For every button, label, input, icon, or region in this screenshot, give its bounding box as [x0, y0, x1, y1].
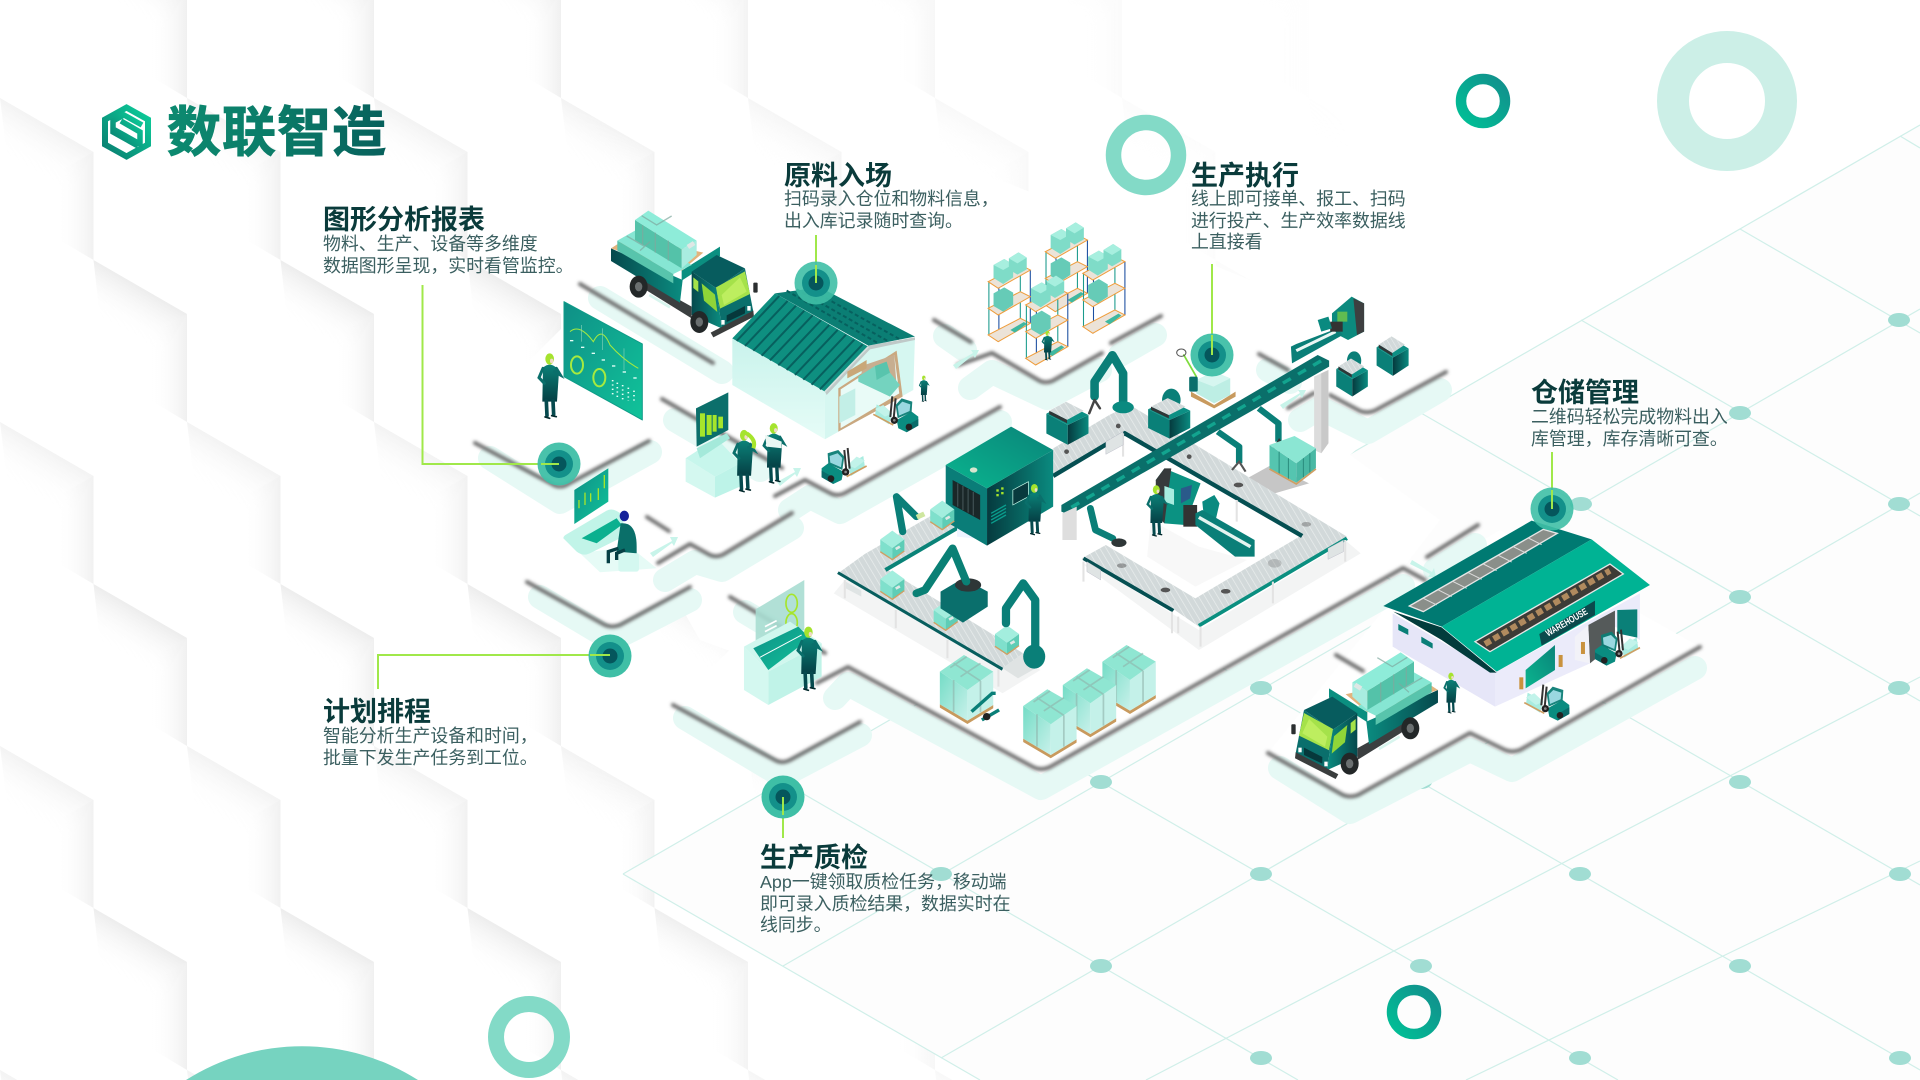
text: warehouse management: 库管理，库存清晰可查。 — [1531, 429, 1728, 449]
leader lines — [378, 235, 1552, 838]
text: warehouse management — [1531, 378, 1728, 449]
text: raw material — [784, 161, 999, 231]
warehouse: finished goods — [1383, 521, 1650, 707]
logo icon — [105, 108, 148, 156]
floor arrows — [650, 350, 1436, 577]
inspection machine — [946, 427, 1053, 546]
person: warehouse — [920, 376, 928, 402]
decorative rings — [496, 47, 1781, 1070]
desk with touch panel — [744, 580, 822, 705]
green half circle bottom left — [186, 1046, 418, 1080]
chart board: analytics — [564, 302, 642, 420]
text: raw material: 扫码录入仓位和物料信息， — [784, 189, 999, 209]
text: planning: 智能分析生产设备和时间， — [323, 726, 538, 746]
conveyor: production loop — [1053, 405, 1347, 647]
text: quality — [760, 843, 1010, 935]
text: quality: 即可录入质检结果，数据实时在 — [760, 894, 1010, 914]
marker: analytics — [538, 442, 580, 486]
pick-and-place area top — [1046, 349, 1236, 445]
text: production execution: 线上即可接单、报工、扫码 — [1191, 189, 1406, 209]
marker: warehouse — [1530, 488, 1574, 530]
text: production execution: 上直接看 — [1191, 232, 1263, 252]
forklift: road — [822, 448, 867, 484]
text: graphic analysis: 数据图形呈现，实时看管监控。 — [323, 256, 573, 276]
text: quality: 生产质检 — [760, 843, 868, 873]
text: production execution — [1191, 161, 1406, 252]
background: diamond lattice with nodes — [623, 124, 1920, 1080]
text: quality: 线同步。 — [760, 915, 832, 935]
forklift: warehouse door — [873, 396, 918, 432]
platform edge shadows — [475, 284, 1700, 796]
truck: top left — [611, 211, 758, 337]
desk with bar screen — [686, 392, 740, 498]
marker: quality — [762, 776, 804, 818]
text: graphic analysis: 图形分析报表 — [323, 205, 485, 235]
warehouse: finished goods: WAREHOUSE — [1544, 606, 1590, 639]
floor shadows below production line — [834, 465, 1361, 693]
storage racks — [988, 222, 1125, 365]
overhead rail and pillars — [1061, 355, 1329, 540]
pallet under gantry — [1269, 436, 1316, 484]
text: production execution: 进行投产、生产效率数据线 — [1191, 211, 1406, 231]
desk with seated person — [563, 468, 657, 572]
text: planning: 批量下发生产任务到工位。 — [323, 748, 538, 768]
forklift: warehouse door — [1595, 630, 1640, 666]
text: graphic analysis: 物料、生产、设备等多维度 — [323, 234, 538, 254]
marker: raw material — [794, 262, 838, 304]
slabs: light teal platform undersides — [490, 298, 1695, 812]
text: production execution: 生产执行 — [1191, 161, 1299, 191]
people at desk — [734, 423, 784, 492]
background: hexagon emboss — [0, 0, 935, 1080]
text: warehouse management: 仓储管理 — [1531, 378, 1639, 408]
forklift: warehouse lot — [1524, 685, 1569, 721]
text: warehouse management: 二维码轻松完成物料出入 — [1531, 407, 1728, 427]
text: raw material: 出入库记录随时查询。 — [784, 211, 963, 231]
person: analyst — [539, 353, 560, 418]
robot arms — [896, 497, 1127, 669]
warehouse: raw material — [732, 287, 915, 439]
lathe in loop — [1148, 468, 1255, 557]
text: planning: 计划排程 — [323, 697, 431, 727]
marker: planning — [588, 634, 632, 678]
lathes and machines right — [1291, 297, 1409, 396]
text: raw material: 原料入场 — [784, 161, 892, 191]
logo text: 数联智造 — [167, 103, 387, 163]
text: graphic analysis — [323, 205, 573, 276]
text: quality: App一键领取质检任务，移动端 — [760, 872, 1007, 892]
truck: warehouse — [1291, 652, 1438, 779]
conveyor: infeed line — [838, 503, 1039, 687]
marker: execution — [1190, 334, 1234, 376]
person: warehouse keeper — [1444, 673, 1458, 713]
text: planning — [323, 697, 538, 768]
platforms: white floor plates — [460, 180, 1700, 797]
cartons and pallets — [880, 501, 1156, 758]
